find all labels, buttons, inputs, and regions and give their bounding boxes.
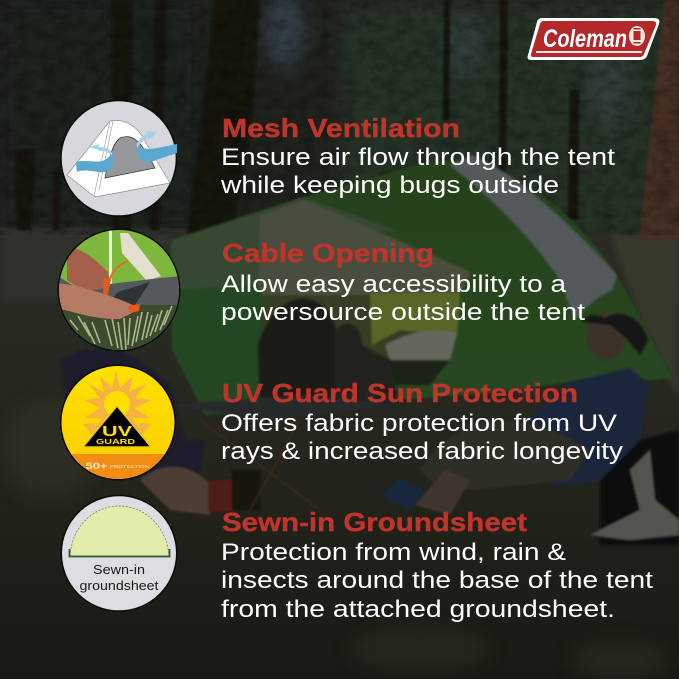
sun rays bbox=[84, 370, 152, 430]
feature text: sewn-in groundsheet: Sewn-in Groundsheet bbox=[222, 507, 527, 537]
foliage texture bbox=[0, 0, 679, 235]
icon: lantern bbox=[629, 26, 645, 46]
feature text: cable opening: powersource outside the tent bbox=[221, 299, 585, 326]
feature text: UV guard sun protection: Offers fabric protection from UV bbox=[221, 410, 617, 437]
feature text: sewn-in groundsheet: insects around the base of the tent bbox=[221, 567, 653, 594]
feature text: sewn-in groundsheet: from the attached groundsheet. bbox=[221, 596, 615, 623]
icon: UV guard badge: PROTECTION bbox=[110, 464, 149, 469]
feature text: cable opening: Allow easy accessibility to a bbox=[221, 271, 567, 298]
tree trunks bbox=[15, 0, 579, 240]
icon: sewn-in groundsheet bbox=[60, 495, 178, 612]
feature text: mesh ventilation bbox=[220, 113, 615, 199]
logo: Coleman: Coleman bbox=[543, 25, 627, 53]
icon: sewn-in groundsheet: groundsheet bbox=[80, 579, 159, 593]
feature text: UV guard sun protection: UV Guard Sun Protection bbox=[222, 378, 578, 408]
icon: UV guard badge: GUARD bbox=[96, 437, 136, 446]
feature text: sewn-in groundsheet: Protection from wind, rain & bbox=[221, 539, 566, 566]
feature text: UV guard sun protection bbox=[221, 378, 623, 465]
feature text: cable opening bbox=[221, 238, 585, 326]
icon: UV guard badge bbox=[60, 364, 176, 482]
tent bbox=[170, 155, 672, 415]
people and dog bbox=[60, 299, 679, 545]
icon: cable opening bbox=[56, 228, 184, 355]
feature text: cable opening: Cable Opening bbox=[222, 238, 434, 268]
feature text: mesh ventilation: Mesh Ventilation bbox=[222, 113, 460, 143]
icon: UV guard badge: 50+ bbox=[86, 461, 108, 471]
icon: sewn-in groundsheet: Sewn-in bbox=[93, 563, 145, 577]
feature text: mesh ventilation: Ensure air flow through the tent bbox=[221, 144, 615, 171]
warning triangle bbox=[83, 406, 151, 447]
ground light patches bbox=[5, 400, 670, 679]
icon: mesh ventilation bbox=[60, 100, 177, 217]
feature text: mesh ventilation: while keeping bugs outside bbox=[220, 172, 559, 199]
feature text: sewn-in groundsheet bbox=[221, 507, 653, 623]
feature text: UV guard sun protection: rays & increased fabric longevity bbox=[221, 438, 623, 465]
logo: Coleman bbox=[528, 18, 659, 60]
icon: UV guard badge: UV bbox=[102, 423, 132, 440]
